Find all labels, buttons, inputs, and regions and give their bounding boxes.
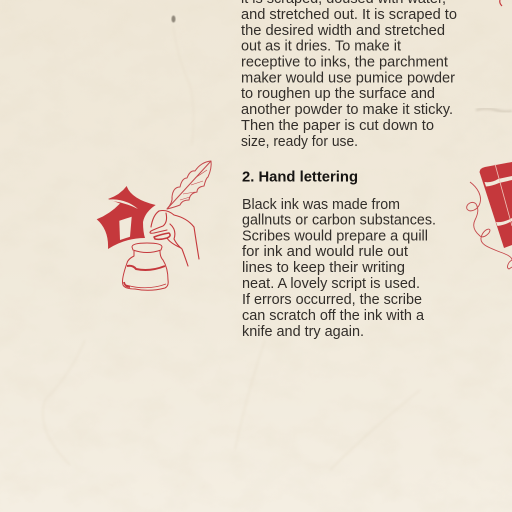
text block: parchment preparation: size, ready for use. — [241, 134, 358, 150]
text block: parchment preparation: another powder to make it sticky. — [241, 102, 453, 118]
icon: cropped red mark top right — [500, 0, 502, 6]
quill feather — [167, 161, 211, 209]
text block: hand lettering — [242, 197, 436, 340]
red calligraphy mark — [97, 186, 156, 249]
book — [480, 162, 512, 248]
text block: parchment preparation: out as it dries. To make it — [241, 38, 401, 54]
text block: hand lettering: neat. A lovely script is used. — [242, 276, 420, 292]
text block: hand lettering: can scratch off the ink with a — [242, 308, 425, 324]
text block: parchment preparation — [241, 0, 457, 150]
text block: parchment preparation: Then the paper is cut down to — [241, 118, 434, 134]
text block: parchment preparation: receptive to inks, the parchment — [241, 54, 448, 70]
text block: hand lettering: for ink and would rule out — [242, 244, 408, 260]
text block: parchment preparation: to roughen up the surface and — [241, 86, 435, 102]
text block: hand lettering: knife and try again. — [242, 324, 364, 340]
heading: hand lettering: 2. Hand lettering — [242, 170, 358, 186]
hand — [150, 210, 199, 266]
text block: parchment preparation: maker would use pumice powder — [241, 70, 455, 86]
text block: hand lettering: gallnuts or carbon substances. — [242, 212, 436, 228]
ink bottle — [122, 243, 168, 290]
icon: red book with thread — [467, 162, 512, 269]
text block: parchment preparation: the desired width and stretched — [241, 23, 445, 39]
text block: parchment preparation: and stretched out. It is scraped to — [241, 7, 457, 23]
icon: quill, hand and ink bottle — [97, 161, 211, 290]
text block: hand lettering: Scribes would prepare a quill — [242, 228, 428, 244]
thread — [467, 182, 512, 269]
text block: hand lettering: lines to keep their writing — [242, 260, 405, 276]
text block: hand lettering: If errors occurred, the scribe — [242, 292, 422, 308]
text block: hand lettering: Black ink was made from — [242, 197, 400, 213]
